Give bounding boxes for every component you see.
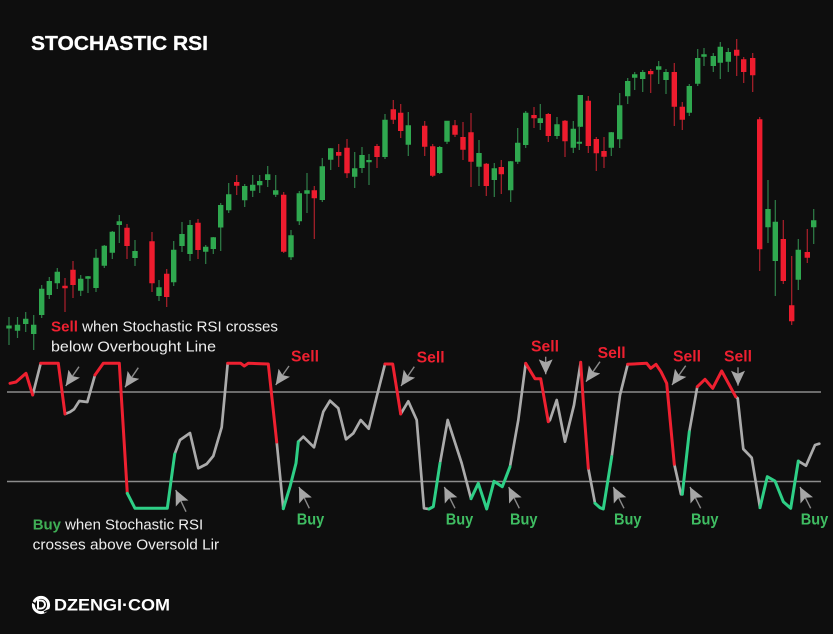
oversold green segments: [127, 432, 798, 509]
logo: [31, 596, 170, 615]
icon: logo mark: [31, 597, 51, 613]
buy labels: Buy: [510, 512, 538, 528]
red candle bodies: [65, 50, 807, 321]
wordmark: DZENGI·COM: [54, 596, 170, 615]
sell labels: Sell: [417, 350, 445, 366]
sell labels: Sell: [673, 348, 701, 366]
buy rule annotation: Buy when Stochastic RSI: [33, 516, 203, 533]
buy rule annotation: crosses above Oversold Lir: [33, 536, 219, 553]
buy labels: Buy: [801, 512, 829, 528]
sell labels: Sell: [291, 348, 319, 366]
green candle wicks: [9, 42, 814, 350]
sell labels: Sell: [724, 348, 752, 366]
title: STOCHASTIC RSI: [31, 32, 208, 55]
sell labels: Sell: [531, 338, 559, 356]
stochastic RSI line: [10, 362, 819, 509]
buy labels: Buy: [691, 512, 719, 528]
sell labels: Sell: [598, 345, 626, 362]
buy labels: Buy: [614, 512, 642, 528]
buy labels: Buy: [297, 512, 325, 528]
sell labels: [291, 338, 752, 366]
signal arrows: [66, 357, 811, 512]
neutral segments: [33, 362, 819, 509]
sell rule annotation: below Overbought Line: [51, 339, 216, 356]
oversold line: [7, 480, 821, 482]
sell rule annotation: Sell when Stochastic RSI crosses: [51, 319, 278, 336]
sell rule annotation: [51, 319, 278, 356]
red candle wicks: [65, 39, 807, 325]
buy labels: [297, 512, 829, 528]
overbought red segments: [10, 362, 736, 493]
candlestick price chart: [9, 39, 814, 350]
overbought line: [7, 391, 821, 393]
buy rule annotation: [33, 516, 219, 553]
green candle bodies: [9, 47, 814, 334]
buy labels: Buy: [446, 512, 474, 528]
